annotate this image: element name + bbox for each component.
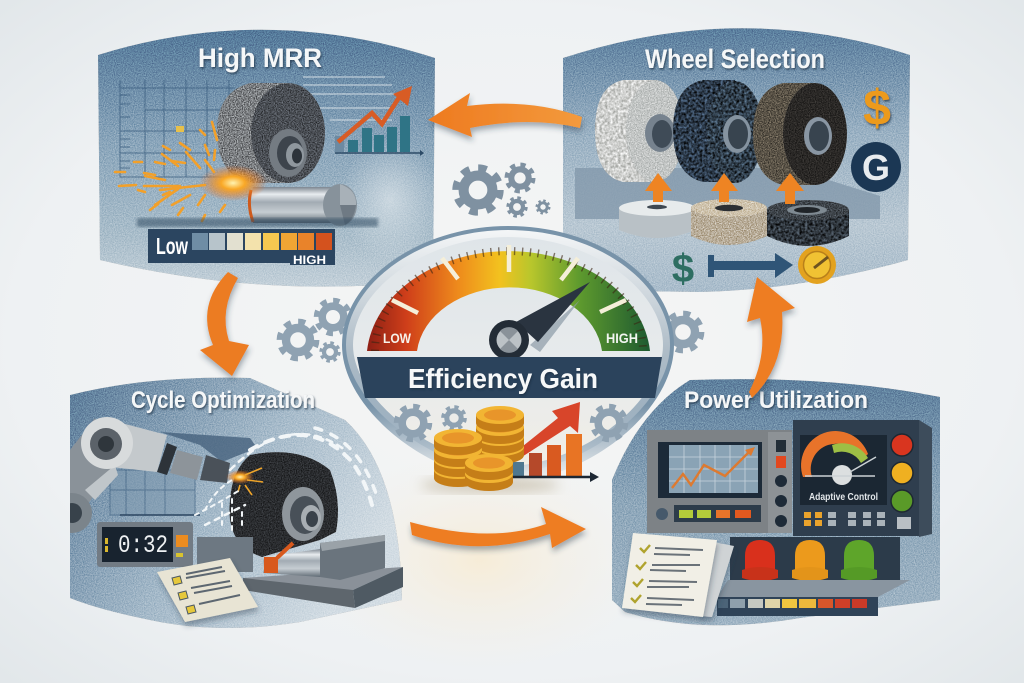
needle	[516, 282, 590, 342]
heading: High MRR	[198, 43, 322, 73]
title banner	[357, 357, 662, 398]
icon: green dollar: $	[672, 247, 694, 291]
monitor	[647, 430, 792, 533]
backdrop grid	[110, 470, 195, 515]
coin shadow	[420, 477, 560, 493]
coin stacks	[434, 406, 524, 491]
gauge dial face	[367, 251, 650, 351]
cost arrow	[708, 253, 793, 278]
panel: Power Utilization	[612, 379, 940, 625]
machine shelf	[137, 218, 378, 227]
wheel	[229, 452, 338, 557]
arrow: cycle optimization to power utilization	[410, 507, 586, 548]
tool spark	[226, 468, 263, 495]
beacon lights	[742, 540, 877, 588]
label high: HIGH	[293, 253, 326, 267]
major ticks	[392, 245, 626, 313]
profit arrow	[508, 402, 580, 462]
digital timer	[97, 522, 193, 567]
background gears top	[456, 165, 549, 216]
background gears middle	[280, 301, 701, 361]
timer reading: 0:32	[118, 531, 168, 560]
adaptive control label: Adaptive Control	[809, 491, 878, 503]
checklist paper	[157, 558, 258, 622]
grinding wheel	[217, 83, 325, 183]
arrow: wheel selection to high MRR	[428, 93, 582, 137]
dark blue wheel	[673, 80, 763, 183]
small disc: steel	[619, 200, 695, 238]
black wheel	[753, 83, 847, 185]
adaptive gauge	[801, 431, 876, 485]
icon: G badge: G	[862, 147, 890, 188]
gauge lower gears	[397, 407, 625, 439]
gauge halo	[342, 226, 674, 482]
machine base	[243, 567, 403, 608]
workpiece cylinder	[249, 184, 357, 226]
label low: Low	[156, 233, 188, 259]
chart grid backdrop	[120, 80, 260, 177]
mini bar chart with rising arrow	[335, 86, 424, 156]
icon: dollar: $	[863, 80, 891, 136]
platform	[575, 168, 880, 219]
panel light patch	[340, 140, 440, 260]
sparks	[115, 122, 267, 221]
gauge ring	[346, 230, 670, 473]
coolant spray	[195, 428, 378, 530]
shelf with colour strip	[717, 580, 910, 616]
robot arm	[52, 417, 257, 533]
label low: LOW	[383, 330, 412, 346]
heading: Power Utilization	[684, 387, 868, 414]
icon: G badge	[851, 142, 901, 192]
bars and axis	[512, 434, 599, 482]
upward arrows	[645, 173, 804, 204]
checklist document	[622, 533, 734, 617]
keypad	[804, 512, 822, 526]
arrow: high MRR to cycle optimization	[200, 272, 249, 376]
white wheel	[595, 80, 684, 182]
low to high scale	[148, 229, 335, 267]
label high: HIGH	[606, 330, 638, 346]
heading: Wheel Selection	[645, 44, 825, 74]
heading: Efficiency Gain	[408, 363, 598, 394]
control cabinet	[793, 420, 932, 537]
arrow: power utilization to wheel selection	[747, 277, 795, 398]
faint lines behind mini chart	[303, 77, 400, 120]
needle shadow	[530, 300, 580, 352]
warm centre glow	[310, 450, 650, 670]
small disc: sand	[691, 199, 767, 245]
panel: Wheel Selection	[563, 28, 910, 292]
status lights	[891, 434, 913, 512]
heading: Cycle Optimization	[131, 387, 315, 414]
icon: gold gauge	[798, 246, 836, 284]
small disc: black	[767, 200, 849, 246]
needle hub	[489, 320, 529, 360]
minor ticks	[375, 251, 643, 351]
gauge disc	[353, 237, 663, 466]
beacon backing	[730, 537, 900, 582]
panel: High MRR	[98, 30, 440, 287]
workpiece	[197, 535, 385, 580]
central gauge: Efficiency Gain	[342, 226, 674, 493]
panel: Cycle Optimization	[52, 378, 403, 628]
